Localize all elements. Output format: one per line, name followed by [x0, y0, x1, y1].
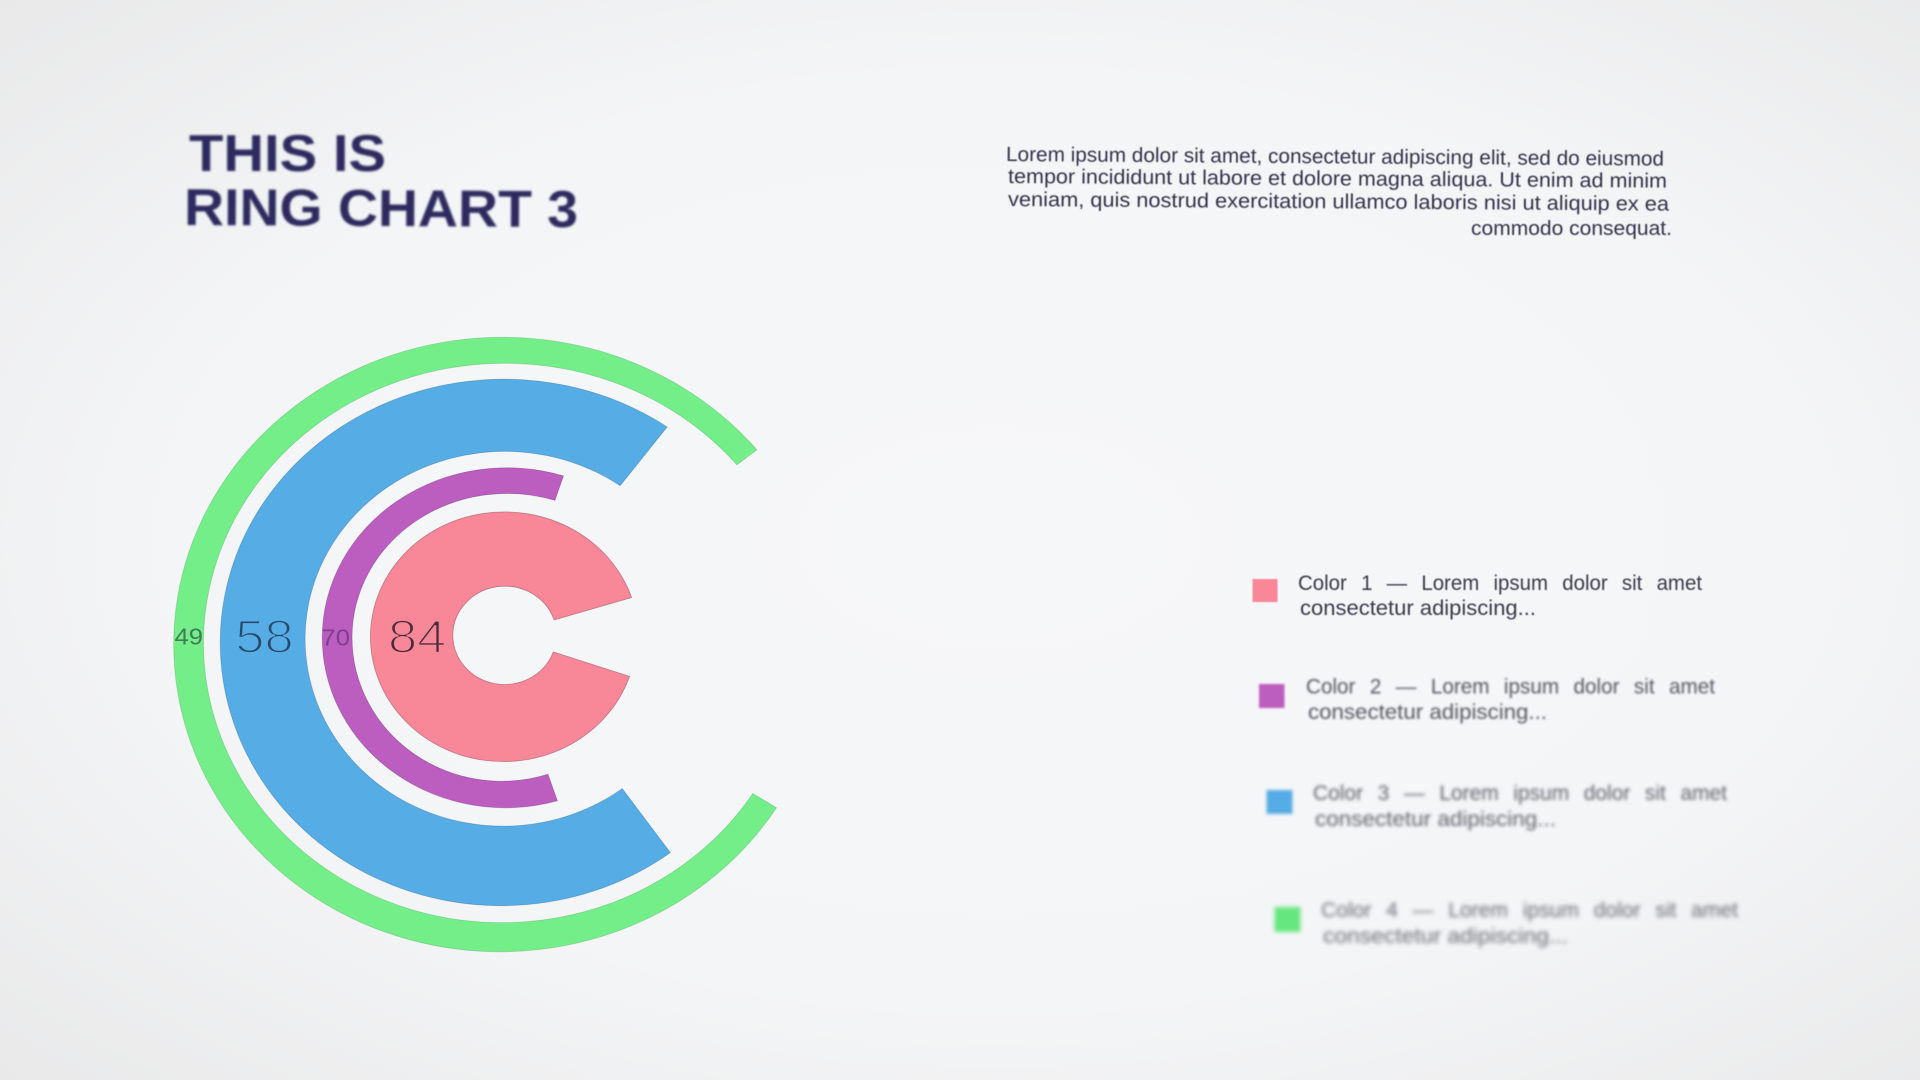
- value 70: 70: [321, 624, 350, 650]
- title: RING CHART 3: [184, 179, 578, 239]
- ring: blue, color 3: [220, 379, 670, 906]
- legend item: color 1: [1252, 571, 1702, 620]
- legend text 2: [1306, 674, 1715, 724]
- legend item: color 2: [1259, 674, 1715, 724]
- legend text 1: consectetur adipiscing...: [1300, 596, 1536, 620]
- value 49: 49: [174, 623, 203, 649]
- ring: purple, color 2: [322, 468, 563, 808]
- legend text 2: consectetur adipiscing...: [1308, 700, 1547, 724]
- value 84: 84: [388, 611, 446, 663]
- title: THIS IS: [189, 125, 386, 183]
- legend text 3: Color 3 — Lorem ipsum dolor sit amet: [1313, 781, 1727, 805]
- swatch: green: [1274, 907, 1300, 932]
- legend item: color 3: [1266, 781, 1727, 831]
- swatch: purple: [1259, 684, 1284, 708]
- legend text 4: Color 4 — Lorem ipsum dolor sit amet: [1321, 898, 1738, 922]
- value 58: 58: [235, 611, 294, 663]
- intro paragraph: Lorem ipsum dolor sit amet, consectetur adipiscing elit, sed do eiusmod: [1006, 143, 1664, 171]
- title: [184, 125, 578, 239]
- swatch: pink: [1252, 579, 1278, 602]
- legend text 3: [1313, 781, 1727, 831]
- legend text 4: [1321, 898, 1738, 948]
- intro paragraph: veniam, quis nostrud exercitation ullamco laboris nisi ut aliquip ex ea: [1008, 188, 1670, 216]
- legend text 2: Color 2 — Lorem ipsum dolor sit amet: [1306, 674, 1715, 698]
- intro paragraph: commodo consequat.: [1471, 217, 1672, 240]
- legend text 3: consectetur adipiscing...: [1315, 807, 1556, 831]
- swatch: blue: [1266, 790, 1292, 814]
- ring chart: [174, 337, 777, 952]
- legend text 4: consectetur adipiscing...: [1323, 924, 1568, 948]
- legend item: color 4: [1274, 898, 1738, 948]
- ring: green, color 4: [174, 337, 777, 952]
- legend text 1: Color 1 — Lorem ipsum dolor sit amet: [1298, 571, 1702, 595]
- legend text 1: [1298, 571, 1702, 620]
- intro paragraph: tempor incididunt ut labore et dolore magna aliqua. Ut enim ad minim: [1008, 165, 1667, 193]
- legend: [1252, 571, 1738, 948]
- intro paragraph: [1006, 143, 1672, 240]
- ring: pink, color 1: [370, 512, 632, 762]
